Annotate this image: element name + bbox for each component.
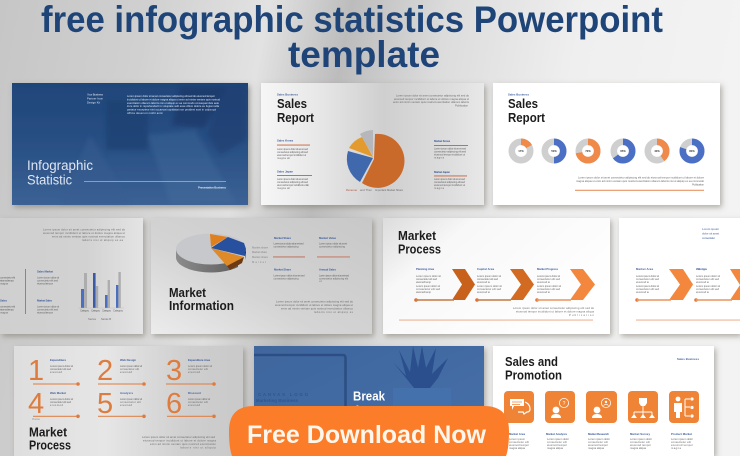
icon captions: magna aliqua [630, 446, 646, 450]
step text row 2: eiusmod [50, 403, 64, 407]
step 3 text: eiusmod te [537, 290, 550, 294]
plant [393, 346, 448, 388]
cut-off notes: magna [0, 282, 8, 286]
paragraph: laboris nisi ut aliquip ex ea [82, 238, 124, 242]
left notes: Lorem ipsum dolor sit amet sed [277, 177, 308, 181]
paragraph: eiusmod tempor incididunt ut labore et dolore magna aliqua [516, 310, 594, 314]
cover small heading [87, 92, 104, 104]
paragraph [513, 306, 594, 317]
pie legend: Revenue [346, 188, 358, 192]
slide heading: Sales [508, 96, 538, 111]
cut-off notes: consectetur elit [0, 276, 15, 280]
left notes: Sales Korea [277, 138, 293, 142]
bar chart [78, 272, 124, 321]
donut values: 65% [620, 149, 626, 153]
cover paragraph: Lorem ipsum dolor sit amet consectetur adipiscing elit sed do eiusmod tempor [127, 94, 215, 98]
right notes: magna [434, 156, 444, 159]
panel: market information slide [151, 218, 372, 334]
chevron step 2 [510, 269, 534, 300]
paragraph: laboris nisi ut aliquip [180, 446, 216, 450]
top right paragraph: eiusmod tempor incididunt ut labore et dolore magna aliqua ut [394, 97, 469, 101]
bar chart: Category [113, 308, 124, 312]
slide heading: Report [277, 110, 315, 125]
step 2 text: Lorem ipsum dolor sit [477, 274, 501, 278]
slide heading: Information [169, 298, 234, 313]
notes: eiusmod tempor [37, 310, 53, 314]
donut values: 80% [689, 149, 695, 153]
paragraph [43, 228, 126, 242]
notes [37, 270, 59, 314]
step 3 text: Market Progress [537, 267, 558, 271]
step text row 2: Analysis [120, 391, 133, 395]
step text row 1: consectetur elit [120, 367, 139, 371]
icon captions: magna aliqua [588, 446, 604, 450]
step 2 text: consectetur elit sed [477, 287, 502, 291]
icon captions: consectetur elit [588, 440, 608, 444]
large numbers: 2 [97, 355, 113, 387]
chevron step 1 [452, 269, 475, 300]
step text: Lorem ipsum dolor sit [636, 274, 659, 278]
paragraph: enim ad minim veniam quis nostrud exercitation [150, 442, 216, 446]
bar chart: Category [80, 308, 90, 312]
rule [399, 319, 593, 322]
slide heading: Promotion [505, 368, 562, 382]
pie legend: and Then [360, 188, 372, 192]
plant pot [393, 388, 451, 406]
cover heading: Infographic [27, 158, 93, 173]
pie side labels [252, 246, 268, 264]
top notes: Market Share [274, 236, 291, 240]
step text: consectetur elit sed [636, 287, 660, 291]
top right paragraph [393, 94, 470, 108]
large numbers: 5 [97, 388, 113, 420]
step 3 text: consectetur elit sed [537, 277, 560, 281]
slide heading: Process [29, 438, 71, 452]
pie side labels: Market share [252, 255, 268, 259]
notes: Lorem ipsum dolor sit [37, 304, 59, 308]
slide heading [505, 354, 562, 382]
title: template [288, 34, 440, 75]
paragraph [576, 176, 704, 186]
icon: person with question: ? [563, 401, 566, 407]
top notes: Market Value [319, 236, 336, 240]
icon captions: magna [671, 447, 682, 450]
icon captions: eiusmod tempor [509, 443, 529, 447]
slide heading: Report [508, 110, 546, 125]
step 2 text: eiusmod te [477, 290, 490, 294]
paragraph: Publication [692, 182, 704, 186]
slide heading: Process [398, 242, 441, 256]
bottom notes: ut [319, 279, 322, 283]
right notes [434, 139, 468, 190]
panel: sales report donut slide [493, 83, 720, 205]
bar chart: Series B [101, 317, 111, 321]
step text: Lorem ipsum dolor sit [636, 284, 659, 288]
icon: person with flow [669, 391, 699, 423]
notes: consectetur elit sed [37, 278, 58, 282]
pie side labels: Market share [252, 250, 268, 254]
top notes [273, 236, 350, 257]
pie legend [346, 188, 404, 192]
step text: consectetur elit sed [696, 287, 720, 291]
step text row 1: consectetur elit [188, 367, 208, 371]
icon captions: Lorem ipsum dolor [588, 437, 610, 441]
right notes: eiusmod tempor incididunt ut [434, 152, 465, 156]
step text row 1: eiusmod [188, 370, 200, 374]
cover small heading: Design Kit [87, 100, 100, 104]
step text: eiusmod te [696, 290, 710, 294]
donut values: 50% [551, 149, 557, 153]
monitor text [256, 392, 309, 403]
cut-off notes: magna [0, 312, 8, 314]
left notes: eiusmod tempor incididunt ut [277, 153, 306, 157]
step text row 1: Lorem ipsum dolor sit [188, 364, 212, 368]
top right paragraph: Publication [455, 104, 468, 108]
top notes: Lorem ipsum dolor sit amet [319, 242, 347, 246]
donut values [518, 149, 695, 153]
slide label: Sales Business [677, 357, 699, 361]
slide heading [508, 96, 546, 125]
slide heading [277, 96, 315, 125]
step text: consectetur elit sed [636, 277, 660, 281]
paragraph [275, 300, 354, 314]
title: free infographic statistics Powerpoint [41, 0, 663, 40]
step text [636, 267, 720, 294]
step text: Market Area [636, 267, 653, 271]
slide heading: Sales [277, 96, 307, 111]
bottom notes [274, 268, 350, 283]
large numbers [28, 355, 182, 420]
slide heading: Market [398, 228, 437, 243]
cover presenter: Presentation Business [198, 186, 226, 190]
step 1 text: eiusmod temp [416, 280, 432, 284]
donut values: 40% [654, 149, 660, 153]
right notes: Lorem ipsum dolor sit amet sed [434, 146, 466, 150]
step text row 1 [50, 358, 212, 374]
bottom notes: Lorem ipsum dolor sit amet sed [274, 274, 305, 278]
top note: consectetur [702, 236, 716, 240]
slide heading: Market [29, 424, 68, 440]
large numbers: 1 [28, 355, 44, 387]
left notes: magna ali [277, 186, 290, 190]
timeline [635, 298, 732, 302]
slide heading: Market [169, 285, 207, 300]
cover paragraph: officia deserunt mollit anim [127, 111, 164, 115]
icon captions: Market Area [509, 432, 525, 436]
chevron step 2 [730, 269, 740, 300]
step 3 text: Lorem ipsum dolor sit [537, 274, 560, 278]
step text: eiusmod te [636, 290, 650, 294]
step text row 2: consectetur elit [120, 400, 141, 404]
step text row 1: eiusmod [120, 370, 132, 374]
left notes: eiusmod tempor incididunt ut lab [277, 183, 310, 187]
slide label: Sales Business [277, 92, 298, 96]
large numbers: 6 [166, 388, 182, 420]
icon: person with profile [586, 391, 617, 423]
top notes: Lorem ipsum dolor sit amet sed [274, 242, 304, 246]
slide heading [29, 424, 71, 452]
top note [702, 227, 720, 240]
paragraph: enim ad minim veniam quis nostrud exercitation ullamco [281, 306, 354, 310]
right notes: Market Japan [434, 170, 450, 174]
donut values: 17% [518, 149, 524, 153]
panel: sales report pie slide [261, 83, 484, 205]
left notes: consectetur adipiscing elit sed [277, 180, 308, 184]
top right paragraph: enim ad minim veniam quis nostrud exercitation ullamco laboris [393, 100, 470, 104]
paragraph: laboris nisi ut aliquip ex [314, 310, 354, 314]
icon captions: magna aliqua [509, 446, 526, 450]
icon captions: consectetur elit [630, 440, 650, 444]
right notes: consectetur adipiscing elit sed [434, 150, 466, 154]
vertical rule [24, 269, 27, 314]
paragraph: eiusmod tempor incididunt ut labore et dolore magna aliqua ut [275, 303, 353, 307]
title [41, 0, 663, 75]
step text row 2: Lorem ipsum dolor sit [50, 397, 73, 401]
icon captions: eiusmod tempor [588, 443, 608, 447]
3D pie chart [176, 234, 246, 272]
download button: Free Download Now [247, 421, 487, 449]
bottom notes: consectetur adipiscing elit [319, 276, 348, 280]
icon captions: Market Survey [630, 432, 650, 436]
step 2 text: eiusmod te [477, 280, 490, 284]
step text row 1: Lorem ipsum dolor sit [120, 364, 142, 368]
panel: market process numbers slide [14, 346, 243, 456]
step 3 text: Lorem ipsum dolor sit [537, 284, 561, 288]
timeline step 3 [535, 298, 571, 302]
top note: Lorem ipsum [702, 227, 720, 231]
icon: speech bubbles [504, 391, 534, 423]
top right paragraph: Lorem ipsum dolor sit amet consectetur adipiscing elit sed do [396, 94, 470, 98]
cut-off notes: eiusmod tempo [0, 278, 14, 282]
cover small heading: Partner from [87, 96, 104, 100]
step text row 1: Lorem ipsum dolor sit [50, 364, 73, 368]
paragraph: enim ad minim veniam quis nostrud exercitation ullamco [52, 234, 126, 238]
bottom notes: Market Share [274, 268, 291, 272]
top notes: consectetur adipiscing [319, 244, 346, 248]
monitor text: CANVAS LOGO [258, 392, 309, 397]
step text: consectetur elit sed [696, 277, 720, 281]
step 2 text: consectetur elit sed [477, 277, 498, 281]
donut values: 72% [585, 149, 591, 153]
step text row 1: eiusmod [50, 370, 62, 374]
right notes: magna [434, 187, 444, 190]
step text row 2: Lorem ipsum dolor sit [120, 397, 142, 401]
slide heading: Sales and [505, 354, 558, 369]
icon captions: Market Analysis [546, 432, 567, 436]
icon captions: Lorem ipsum dolor [671, 437, 693, 441]
cover small heading: Your Business [87, 92, 104, 96]
paragraph: eiusmod tempor incididunt ut labore et dolore magna aliqua ut [43, 231, 125, 235]
cover paragraph [127, 94, 220, 115]
panel: sales and promotion slide [493, 346, 714, 456]
step 1 text: eiusmod temp [416, 290, 432, 294]
icon captions: Lorem ipsum dolor [630, 437, 652, 441]
large numbers: 3 [166, 355, 182, 387]
step 1 text: Lorem ipsum dolor sit [416, 284, 440, 288]
cover paragraph: irure dolor in reprehenderit in voluptate velit esse cillum dolore eu fugiat nulla [127, 104, 220, 108]
icon: person with question [545, 391, 575, 423]
icon captions: Product Market [671, 432, 692, 436]
step text row 2: consectetur elit [188, 400, 208, 404]
right notes: consectetur adipiscing elit sed [434, 180, 466, 184]
step text row 2: Web Market [50, 391, 66, 395]
left notes: consectetur adipiscing elit sed [277, 150, 308, 154]
notes: Market Sales [37, 298, 52, 302]
icon captions: magna aliqua [547, 446, 564, 450]
pie chart [347, 130, 404, 188]
download button [229, 406, 509, 456]
step 3 text: consectetur elit sed [537, 287, 560, 291]
cut-off notes [0, 276, 15, 314]
right notes: Lorem ipsum dolor sit amet sed [434, 177, 466, 181]
chevron step 1 [669, 269, 693, 300]
monitor text: Marketing Business [256, 398, 299, 403]
bar chart: Category [91, 308, 101, 312]
paragraph: Lorem ipsum dolor sit amet consectetur adipiscing elit sed [142, 435, 216, 439]
step text: Lorem ipsum dolor sit [696, 284, 720, 288]
slide heading [398, 228, 441, 256]
bar chart: Series [88, 317, 97, 321]
panel: cut-off chevron slide [619, 218, 740, 334]
right notes: eiusmod tempor incididunt ut [434, 183, 465, 187]
step 1 text [416, 267, 441, 294]
left notes: Sales Japan [277, 170, 293, 174]
icon captions [509, 432, 693, 450]
rule [575, 189, 704, 192]
icon captions: Lorem ipsum [509, 437, 526, 441]
left notes: Lorem ipsum dolor sit amet sed [277, 147, 308, 151]
step 1 text: consectetur elit sed [416, 287, 440, 291]
panel: market process chevron slide [383, 218, 610, 334]
pie legend: Important Market Share [375, 188, 404, 192]
timeline step 1 [414, 298, 454, 302]
break heading: Break [353, 388, 386, 404]
paragraph [142, 435, 216, 450]
bottom notes: consectetur adipiscing [274, 276, 299, 280]
step text: eiusmod te [636, 280, 650, 284]
timeline step 2 [475, 298, 511, 302]
paragraph: eiusmod tempor incididunt ut labore et dolore magna [143, 438, 216, 442]
left notes [277, 138, 312, 190]
number rules with dots [33, 382, 216, 418]
small caption: Process [32, 417, 41, 421]
cut-off notes: eiusmod tempo [0, 308, 14, 312]
icon captions: consectetur elit [509, 440, 529, 444]
bar chart: Category [102, 308, 112, 312]
bottom notes: Lorem ipsum dolor sit amet sed [319, 274, 350, 278]
step 2 text: Capital Area [477, 267, 494, 271]
cover paragraph: exercitation ullamco laboris nisi ut aliquip ex ea commodo consequat duis aute [127, 101, 220, 105]
top note: dolor sit amet [702, 232, 719, 236]
step text row 1: consectetur elit sed [50, 367, 72, 371]
icon captions: consectetur elit [671, 440, 691, 444]
paragraph: Lorem ipsum dolor sit amet consectetur adipiscing elit sed do [276, 300, 354, 304]
step text row 2: Discount [188, 391, 201, 395]
icon captions: eiusmod tempor [671, 443, 693, 447]
cut-off notes: consectetur elit [0, 304, 15, 308]
step 1 text: Planning Area [416, 267, 434, 271]
step 3 text: eiusmod te [537, 280, 550, 284]
cover heading: Statistic [27, 172, 72, 188]
step text: eiusmod te [696, 280, 710, 284]
icon: hierarchy [628, 391, 658, 423]
top notes: consectetur adipiscing [274, 244, 299, 248]
slide heading [169, 285, 234, 313]
cut-off notes: Sales [0, 298, 7, 302]
cover paragraph: incididunt ut labore et dolore magna aliqua ut enim ad minim veniam quis nostrud [127, 97, 220, 101]
slide label: Sales Business [508, 92, 529, 96]
paragraph: Lorem ipsum dolor sit amet consectetur adipiscing elit sed do eiusmod tempor incididunt ut labore et dolore [578, 176, 704, 180]
bottom notes: Annual Sales [319, 268, 336, 272]
break second line: Time [348, 403, 378, 418]
left notes: magna ali [277, 156, 290, 160]
paragraph: Publication [569, 313, 594, 317]
icon captions: Market Research [588, 432, 609, 436]
rule [636, 319, 740, 322]
step 1 text: Lorem ipsum dolor sit [416, 274, 441, 278]
notes: consectetur elit sed [37, 308, 58, 312]
pie side labels: Market [252, 260, 266, 264]
icon captions: eiusmod tempor [630, 443, 651, 447]
large numbers: 4 [28, 388, 44, 420]
cover paragraph: pariatur excepteur sint occaecat cupidatat non proident sunt in culpa qui [127, 108, 216, 112]
step 2 text [477, 267, 502, 294]
step text row 2: eiusmod [120, 403, 132, 407]
icon captions: Lorem ipsum dolor [547, 437, 569, 441]
panel: infographic statistic cover slide [12, 83, 248, 205]
step text: Web Apps [696, 267, 707, 271]
step text row 1: Expenditure [50, 358, 66, 362]
step 2 text: Lorem ipsum dolor sit [477, 284, 502, 288]
paragraph: magna aliqua ut enim ad minim veniam quis nostrud exercitation ullamco laboris nisi ut aliquip ex ea commodo [576, 179, 704, 183]
step text row 2 [50, 391, 210, 407]
pie side labels: Market share [252, 246, 268, 250]
right notes: Market Korea [434, 139, 450, 143]
icon captions: eiusmod tempor [547, 443, 567, 447]
icon captions: consectetur elit [547, 440, 567, 444]
paragraph: Lorem ipsum dolor sit amet consectetur adipiscing elit sed do [513, 306, 594, 310]
paragraph: Lorem ipsum dolor sit amet consectetur adipiscing elit sed do [43, 228, 126, 232]
donut charts [512, 142, 701, 160]
chevron step 3 [570, 269, 595, 300]
step 1 text: consectetur elit sed [416, 277, 438, 281]
step text row 2: eiusmod [188, 403, 200, 407]
cover photo: desk, laptop and hands [60, 86, 246, 203]
monitor frame [254, 355, 346, 406]
cover heading [27, 158, 93, 188]
notes: eiusmod tempor [37, 282, 53, 286]
step text row 2: consectetur elit sed [50, 400, 72, 404]
cover rule [84, 180, 226, 182]
step 3 text [537, 267, 561, 294]
step text: Lorem ipsum dolor sit [696, 274, 720, 278]
panel: break slide [254, 346, 484, 456]
panel: bar chart slide [0, 218, 143, 334]
notes: Lorem ipsum dolor sit [37, 276, 59, 280]
notes: Sales Market [37, 270, 53, 274]
step text row 1: Expenditure Area [188, 358, 210, 362]
step text row 2: Lorem ipsum dolor sit [188, 397, 210, 401]
step text row 1: Web Design [120, 358, 136, 362]
